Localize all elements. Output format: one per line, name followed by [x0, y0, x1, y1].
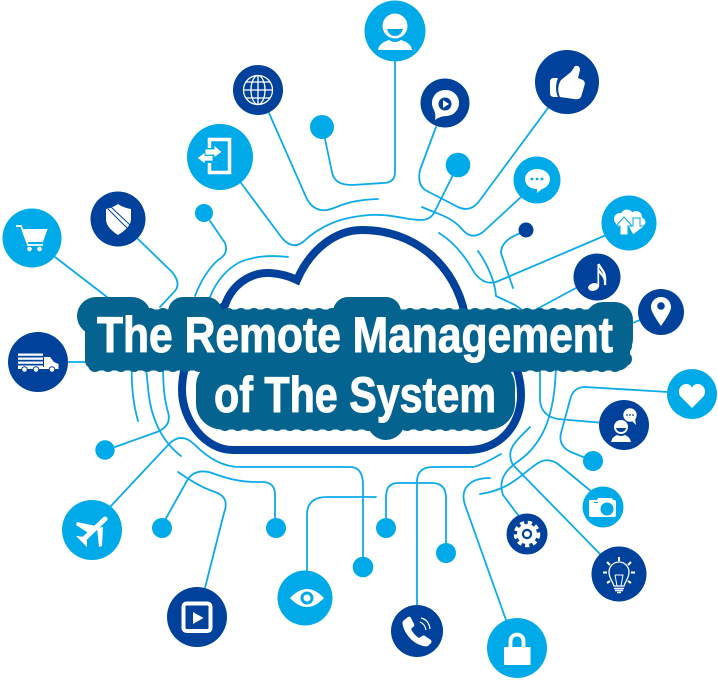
icon: padlock	[487, 618, 547, 678]
title text: The Remote Management	[97, 307, 613, 363]
icon: gear	[506, 514, 548, 554]
circuit connector lines	[55, 60, 668, 620]
icon: music note	[574, 254, 620, 300]
title banner	[77, 297, 633, 440]
title text: of The System	[214, 367, 496, 423]
icon: heart	[667, 369, 717, 419]
title text	[97, 307, 613, 423]
icon: cloud transfer	[602, 196, 656, 250]
icon: shopping cart	[2, 208, 62, 268]
icon: globe	[233, 65, 283, 115]
icon: door with arrows	[187, 124, 253, 190]
connector end dots	[95, 115, 603, 577]
icon: person with chat	[599, 400, 649, 450]
icon: telephone	[391, 605, 443, 657]
icon: airplane	[62, 500, 122, 560]
icon: chat bubble	[514, 156, 560, 204]
icon: video play	[167, 587, 227, 647]
icon: video speech bubble	[420, 78, 470, 128]
icon: eye	[278, 570, 332, 626]
icon: light bulb	[592, 546, 646, 602]
icon: thumbs up	[535, 50, 599, 114]
icon: shield	[90, 192, 146, 246]
icon: user	[364, 0, 426, 62]
icon: location pin	[638, 289, 684, 335]
icon: delivery truck	[8, 332, 68, 392]
icon: camera	[582, 486, 624, 528]
cloud outline	[182, 230, 521, 450]
